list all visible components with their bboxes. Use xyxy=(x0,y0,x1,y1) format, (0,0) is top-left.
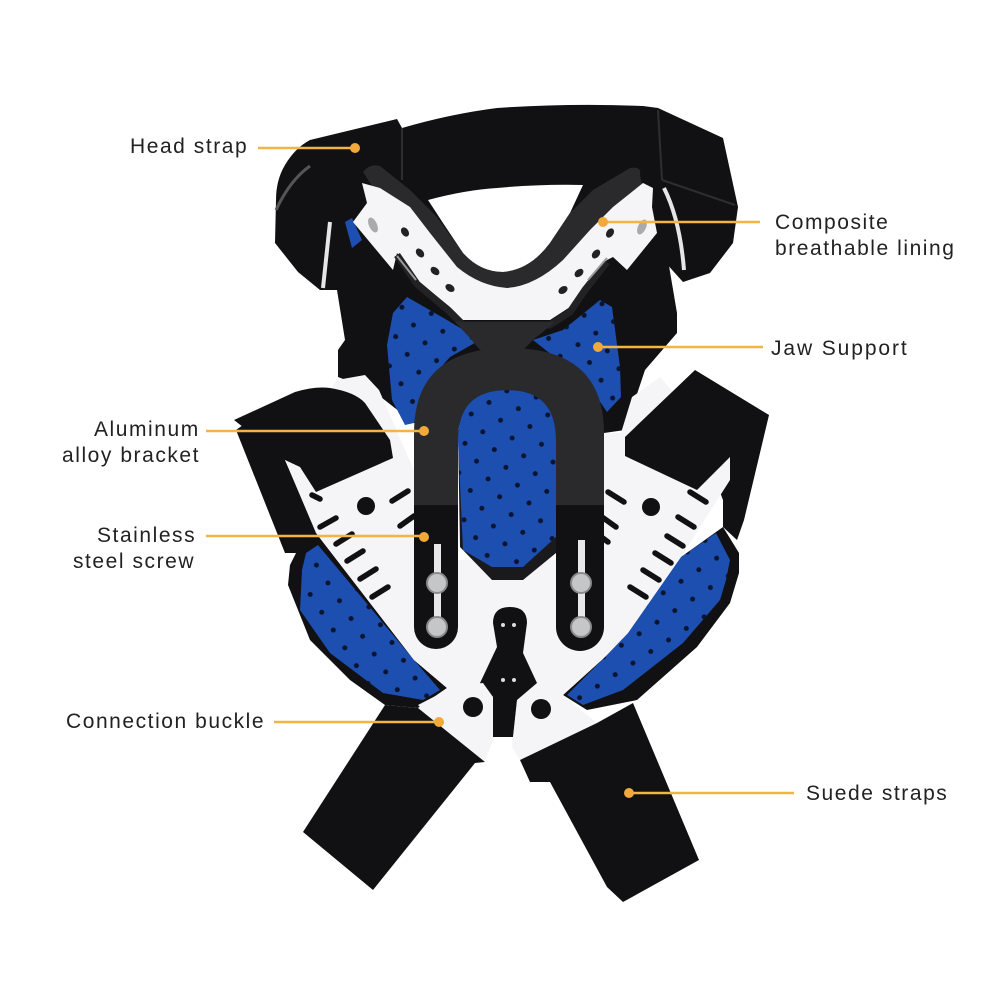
label: Connection buckle xyxy=(66,710,444,733)
left back strap xyxy=(236,420,318,553)
label: Composite breathable lining xyxy=(598,211,955,260)
label: Jaw Support xyxy=(593,337,909,360)
head strap xyxy=(275,105,738,290)
stainless steel screws xyxy=(427,540,591,637)
label: Stainless steel screw: Stainless xyxy=(97,524,196,547)
neck opening xyxy=(428,185,583,272)
label: Stainless steel screw xyxy=(73,524,429,573)
label: Stainless steel screw: steel screw xyxy=(73,550,195,573)
label: Suede straps xyxy=(624,782,948,805)
label: Aluminum alloy bracket xyxy=(62,418,429,467)
label: Jaw Support: Jaw Support xyxy=(771,337,909,360)
left shoulder strap xyxy=(234,388,393,492)
label: Head strap xyxy=(130,135,360,158)
suede strap right xyxy=(520,703,699,902)
right shoulder strap xyxy=(625,370,769,490)
label: Connection buckle: Connection buckle xyxy=(66,710,265,733)
collar and jaw support xyxy=(353,165,657,350)
connection buckle xyxy=(418,607,597,762)
label: Composite breathable lining: Composite xyxy=(775,211,889,234)
suede strap left xyxy=(303,705,485,890)
center blue panel xyxy=(458,390,556,580)
chest plate xyxy=(285,375,730,762)
label: Aluminum alloy bracket: Aluminum xyxy=(94,418,200,441)
back panel xyxy=(337,180,677,433)
upper blue lining left xyxy=(345,218,480,425)
right back strap xyxy=(700,400,769,540)
lower blue lining left xyxy=(288,533,447,708)
upper blue lining right xyxy=(533,190,621,412)
label: Composite breathable lining: breathable lining xyxy=(775,237,955,260)
label: Aluminum alloy bracket: alloy bracket xyxy=(62,444,200,467)
aluminum alloy bracket xyxy=(414,348,604,651)
label: Suede straps: Suede straps xyxy=(806,782,948,805)
lower blue lining right xyxy=(563,527,739,710)
label: Head strap: Head strap xyxy=(130,135,248,158)
